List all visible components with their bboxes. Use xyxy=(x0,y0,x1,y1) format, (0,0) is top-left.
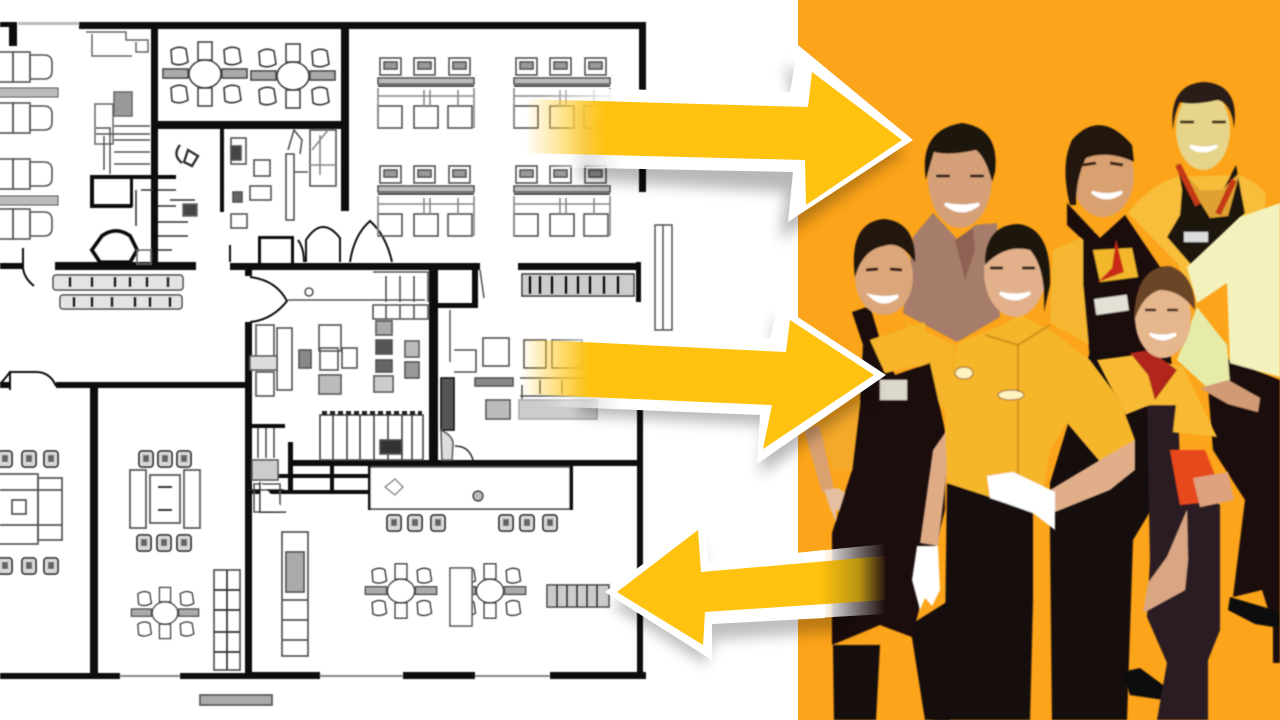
logos xyxy=(955,367,973,379)
small room fixtures xyxy=(176,130,336,228)
sleeve xyxy=(1177,307,1230,392)
red scarf xyxy=(1130,350,1177,400)
arrow 3 fill xyxy=(617,530,885,645)
badge xyxy=(880,380,907,400)
head xyxy=(1135,278,1191,358)
shirt xyxy=(945,315,1135,512)
arrow 2: plan to staff xyxy=(520,304,886,475)
yellow shoulder xyxy=(905,322,955,420)
person: man at far right, back row xyxy=(1128,82,1266,290)
arrow 2 fill xyxy=(520,320,874,449)
lower body xyxy=(1050,350,1178,720)
lounge tables xyxy=(0,470,609,705)
uniform xyxy=(1128,175,1266,290)
arrow 2 outline xyxy=(540,304,886,464)
glove right xyxy=(987,472,1055,530)
bar counter xyxy=(53,275,183,309)
arm and glove left xyxy=(920,430,947,546)
legs xyxy=(833,645,880,720)
person: man, centre back xyxy=(903,123,1000,342)
forearm and hand xyxy=(1193,472,1234,507)
yellow blouse xyxy=(1097,355,1217,437)
arrow 1 fill xyxy=(525,72,902,205)
doors and thin lines xyxy=(0,221,672,390)
shoe xyxy=(1122,668,1167,700)
arrow 1 outline xyxy=(540,45,913,222)
person: woman, back row centre xyxy=(1050,125,1178,720)
panel: floor plan background xyxy=(0,0,798,720)
shirt xyxy=(903,213,1000,342)
stools xyxy=(0,451,557,574)
service window strip xyxy=(522,274,634,296)
arm xyxy=(804,425,834,492)
arrow 3: staff to plan xyxy=(605,518,885,665)
skirt and leg xyxy=(1147,403,1220,720)
right-hand service stations xyxy=(441,338,597,460)
kitchen equipment xyxy=(250,272,428,512)
forearm xyxy=(1050,440,1135,513)
head xyxy=(1072,135,1134,217)
arrow 1 shadow xyxy=(580,64,905,240)
head xyxy=(928,128,992,228)
round tables in bottom rooms xyxy=(131,564,526,639)
person: small woman at right front xyxy=(1097,266,1234,720)
arrow 3 shadow xyxy=(612,540,860,665)
floor plan xyxy=(0,22,672,705)
equipment: corridor shelves xyxy=(86,32,197,264)
hand xyxy=(1200,380,1260,412)
person: pale-shirt man at far right xyxy=(1177,203,1280,663)
uniform shoulders xyxy=(1050,232,1120,345)
structural walls xyxy=(0,22,646,679)
panel: orange background xyxy=(798,0,1280,720)
head xyxy=(1176,90,1230,170)
workstation blocks xyxy=(378,58,474,128)
arrow 2 shadow xyxy=(580,318,878,475)
trousers xyxy=(933,480,1033,720)
red accent xyxy=(1170,450,1225,505)
counter in bottom room xyxy=(248,467,570,512)
head xyxy=(984,227,1046,317)
person: woman in front xyxy=(912,224,1135,720)
apron xyxy=(1067,203,1175,360)
person: woman at left xyxy=(804,219,955,720)
shoe xyxy=(1228,597,1280,628)
arrow 1: plan to staff xyxy=(525,45,913,240)
dining room sets xyxy=(163,42,247,106)
revolving door xyxy=(92,231,137,262)
apron and skirt xyxy=(832,306,945,645)
table sets: top-left room xyxy=(0,52,58,239)
shirt xyxy=(1187,203,1280,377)
head xyxy=(855,239,913,315)
arrow 3 outline xyxy=(605,518,885,660)
hand xyxy=(824,488,885,522)
trousers xyxy=(1205,350,1280,663)
